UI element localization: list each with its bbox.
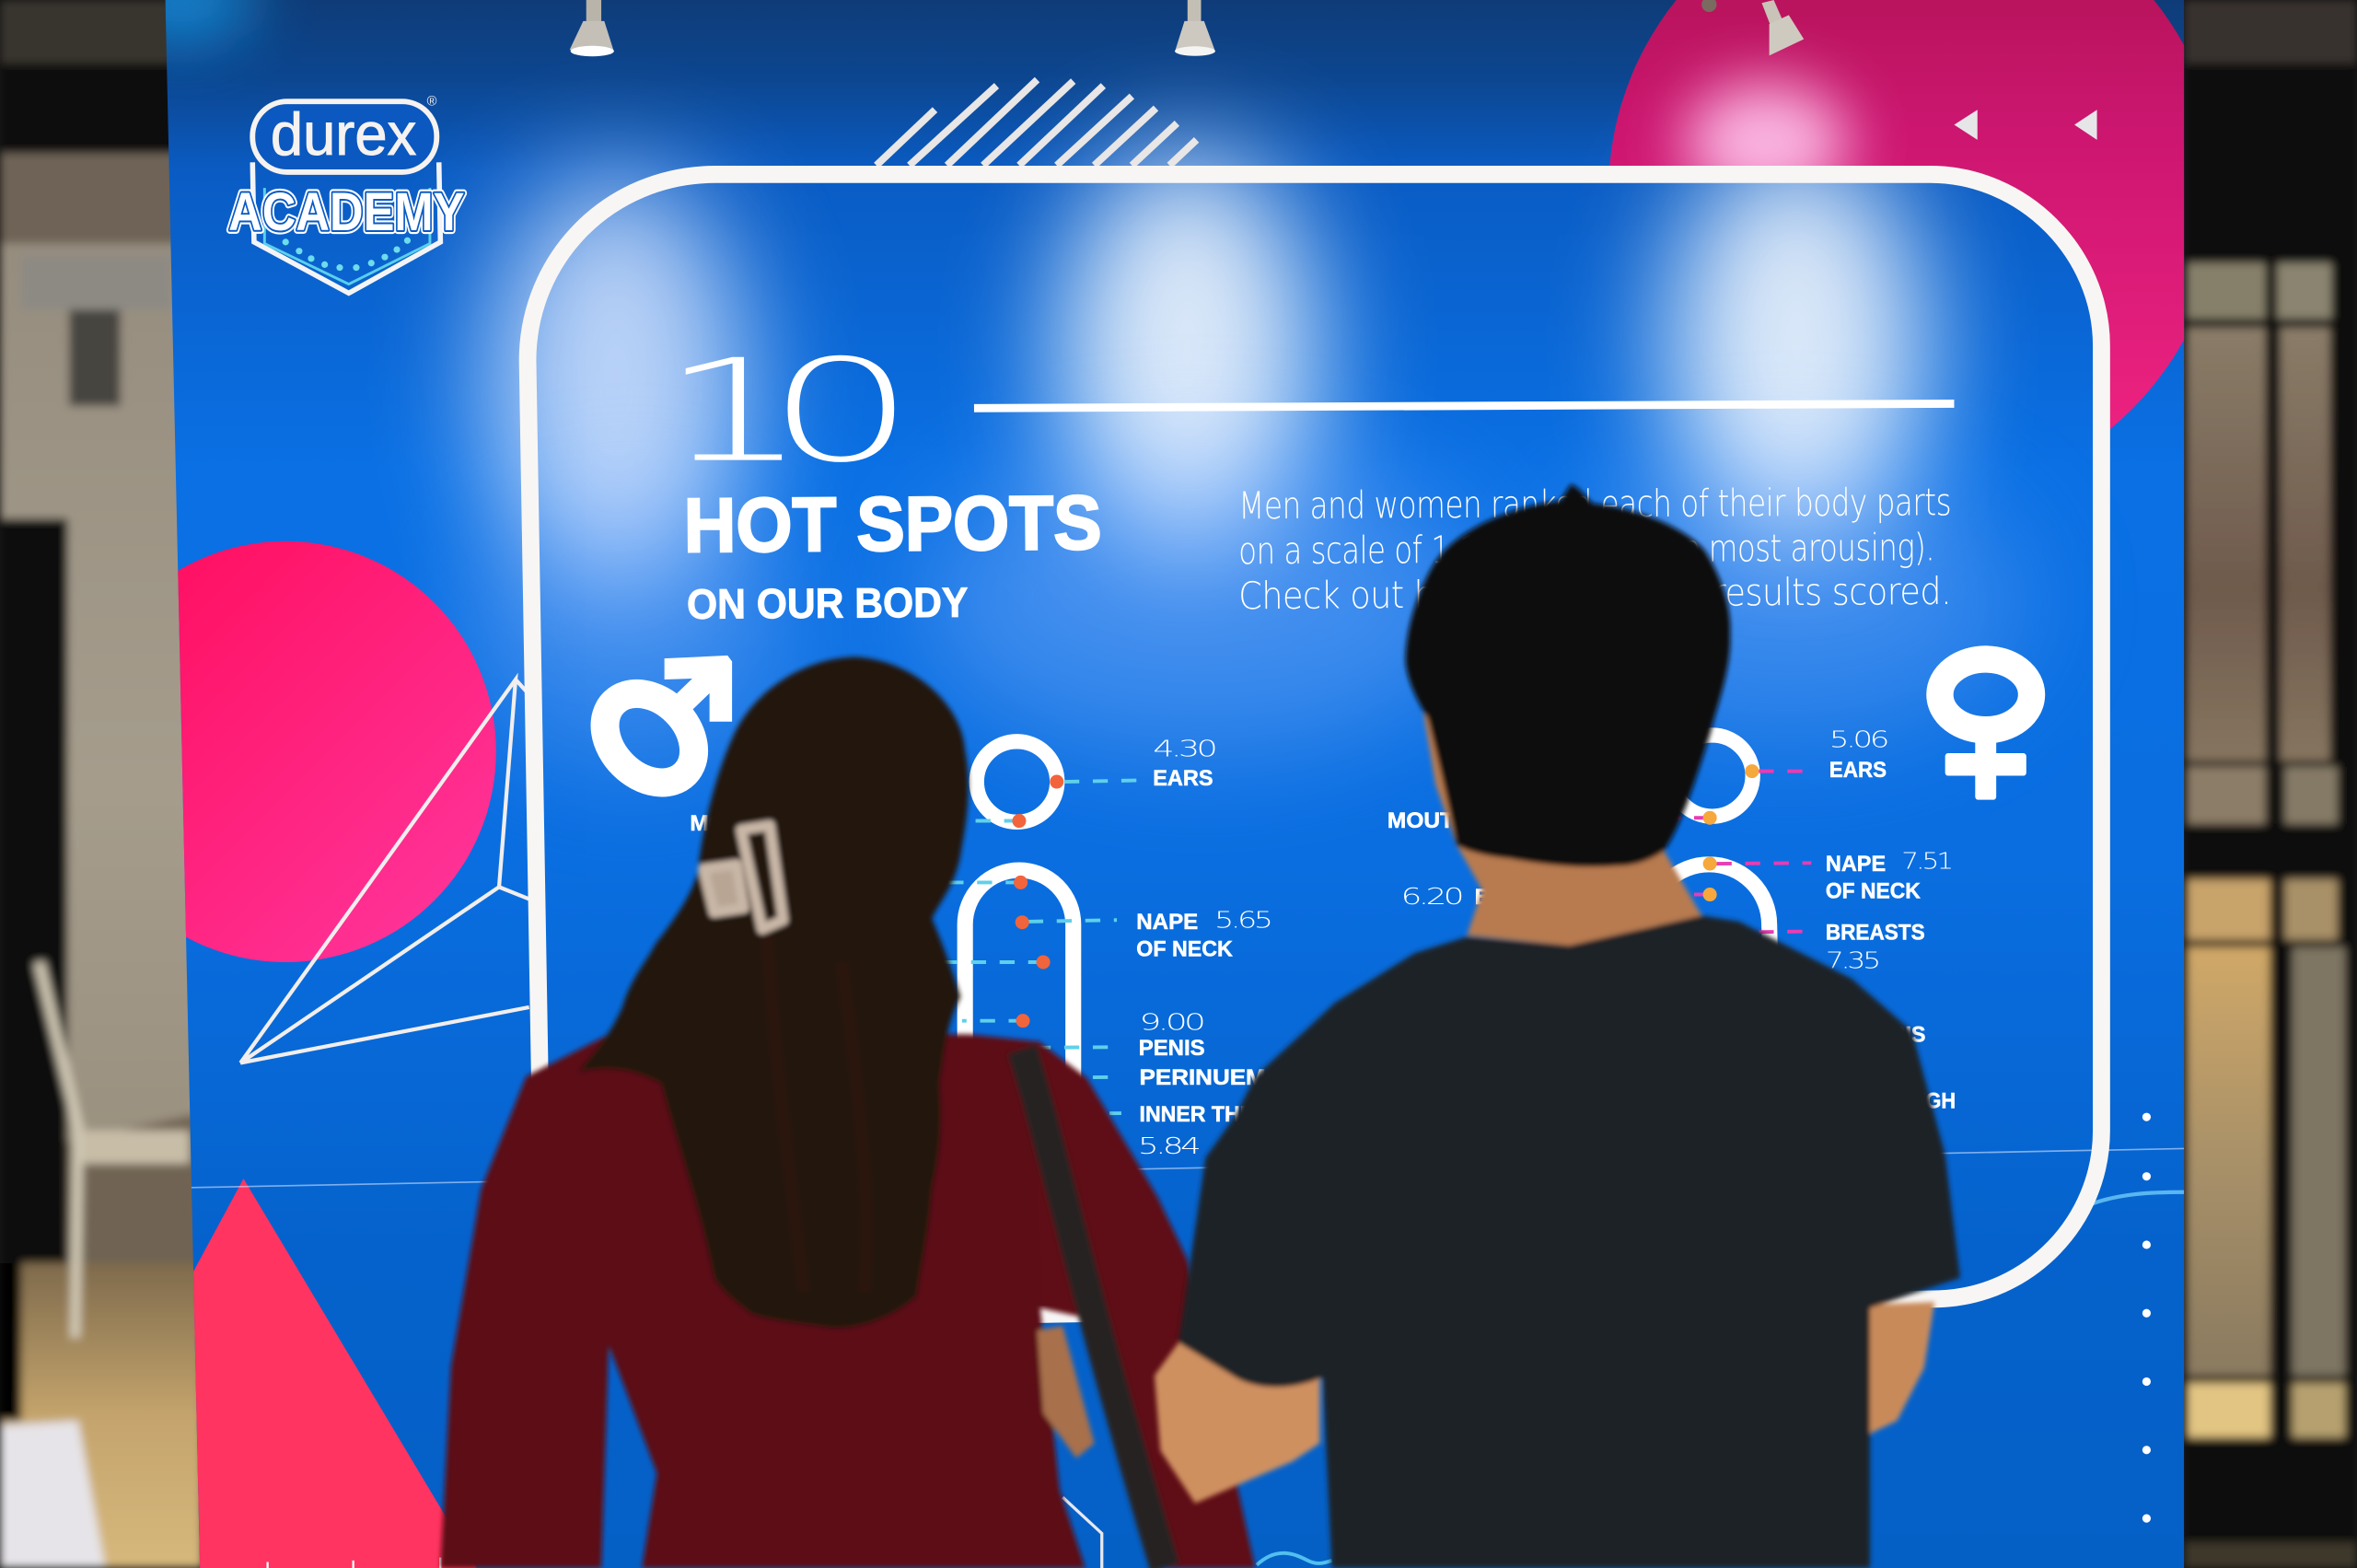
male labels: INNER THIGH [1140,1102,1278,1127]
seam of the board [188,1148,2184,1188]
dots column right [2142,1113,2151,1523]
female labels: BREASTS [1826,920,1925,945]
woman viewer [440,657,1255,1568]
top left corner glow [105,0,256,45]
bottom decorative line [1062,1497,1102,1568]
male labels: PENIS [1139,1036,1205,1061]
female labels: 6.20 [1401,883,1462,910]
male labels: 5.84 [1138,1132,1199,1159]
male body diagram [690,735,1278,1293]
female labels: OF NECK [1826,879,1921,904]
lamp left [570,0,614,56]
woman hair highlight [767,932,866,1293]
male connector lines [902,780,1144,1114]
intro paragraph: Men and women ranked each of their body parts [1238,480,1951,528]
man left arm [1155,1342,1319,1504]
man t-shirt [1178,915,1960,1568]
female labels: 5.06 [1829,726,1887,752]
female labels: MOUTH [1387,808,1470,833]
subheading: on our body: ON OUR BODY [687,579,968,628]
logo wordmark durex: durex [271,100,416,168]
male hot spot dots [1012,775,1063,1028]
hatched half circle [877,80,1197,166]
spot lamps [570,0,1804,56]
icon: female symbol [1940,659,2032,800]
male labels: 4.30 [1153,735,1215,761]
man neck [1423,714,1701,946]
female labels: CLITORIS [1826,1023,1925,1048]
intro paragraph: on a scale of 1-10 (10 being the most arousing). [1238,525,1934,573]
female labels: BACK [1475,885,1540,910]
spotlight on pink circle [1684,83,1849,203]
male labels: MOUTH [690,811,772,836]
spotlight glows inside frame [466,143,2029,767]
spotlight spill outside frame [403,72,1353,781]
light blue curve right [2091,1192,2184,1204]
man right arm [1860,1302,1934,1439]
male labels: 9.00 [1140,1008,1203,1035]
logo ACADEMY inner: ACADEMY [228,182,464,242]
female connector lines [1594,772,1816,932]
logo shield [252,162,440,293]
female hot spot dots [1703,764,1759,901]
heading: hot spots: HOT SPOTS [683,480,1102,568]
female head ring [1672,735,1753,817]
male labels: OF NECK [1136,936,1233,961]
top right pink circle [1609,0,2184,429]
title rule [974,403,1954,408]
male labels: EARS [1153,766,1213,791]
man viewer [1155,484,1960,1568]
bottom ticks [268,1558,440,1568]
logo ACADEMY outline: ACADEMY [228,182,464,242]
background: windows right [2184,0,2357,1568]
female labels: 7.51 [1901,848,1951,875]
male head ring [977,741,1057,822]
intro paragraph [1238,480,1951,618]
woman dress [440,1034,1086,1568]
logo pill [252,101,436,172]
male labels: NAPE [1136,910,1198,935]
male labels: 5.65 [1214,906,1271,933]
bottom wave [1257,1553,1332,1565]
woman hand [1038,1326,1095,1458]
frame interior blue [536,182,2094,805]
arrow triangles top right [1954,110,2097,140]
man hair [1406,484,1730,867]
lamp right [1701,0,1804,55]
background: room interior left [0,0,203,1568]
title number 10: 10 [660,329,895,494]
female labels: INNER THIGH [1826,1088,1956,1113]
woman dress right flap [1034,1040,1255,1568]
lower left pink triangle [192,1179,477,1568]
female labels [1387,726,1956,1113]
woman hair [579,657,969,1328]
female labels: EARS [1829,758,1887,783]
female labels: 7.35 [1826,947,1878,974]
logo registered mark: ® [427,94,437,109]
white rounded frame [528,174,2101,1320]
left pink circle [178,541,496,962]
woman bag strap [1022,1050,1165,1568]
icon: male symbol [587,656,732,800]
lamp middle [1175,0,1215,56]
male labels: PERINUEM [1140,1065,1266,1090]
male labels [690,735,1278,1159]
female torso outline [1649,865,1772,1052]
intro paragraph: Check out how the following results scored. [1238,569,1951,618]
male torso outline [965,870,1074,1293]
female body diagram [1387,726,1956,1113]
logo: durex academy [228,94,464,293]
woman hair clip [703,825,784,929]
paper plane outline [240,679,529,1063]
female labels: NAPE [1826,852,1886,877]
